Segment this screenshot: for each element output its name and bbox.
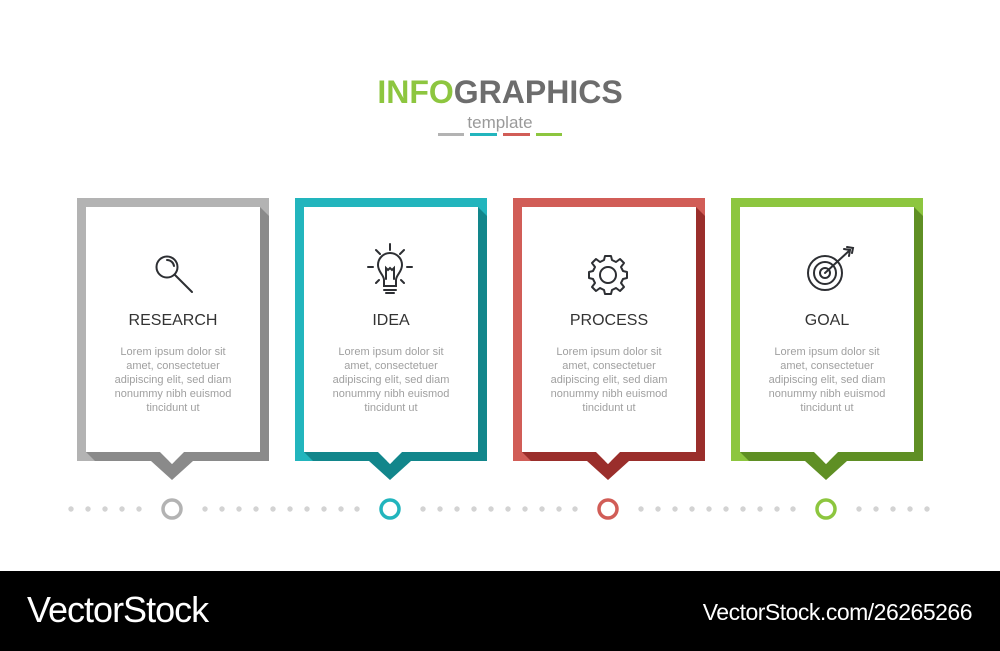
text: idea body: amet, consectetuer <box>344 360 438 372</box>
text: goal body: tincidunt ut <box>800 402 854 414</box>
card: goal <box>731 198 923 480</box>
text: process body: Lorem ipsum dolor sit <box>556 346 662 358</box>
card: idea <box>295 198 487 480</box>
text: goal body: amet, consectetuer <box>780 360 874 372</box>
text: research body: tincidunt ut <box>146 402 200 414</box>
heading: idea: IDEA <box>372 312 410 329</box>
text: research body: adipiscing elit, sed diam <box>115 374 231 386</box>
card: process <box>513 198 705 480</box>
footer bar: VectorStock.com/26265266 <box>703 599 972 625</box>
text: idea body: adipiscing elit, sed diam <box>333 374 449 386</box>
text: idea body: tincidunt ut <box>364 402 418 414</box>
text: idea body: nonummy nibh euismod <box>333 388 449 400</box>
text: goal body: nonummy nibh euismod <box>769 388 885 400</box>
timeline <box>68 500 930 518</box>
footer bar: VectorStock <box>27 589 210 630</box>
footer bar <box>0 571 1000 651</box>
text: research body: Lorem ipsum dolor sit <box>120 346 226 358</box>
icon: magnifier <box>156 256 192 292</box>
text: idea body: Lorem ipsum dolor sit <box>338 346 444 358</box>
icon: gear <box>589 256 627 294</box>
title: INFOGRAPHICS <box>377 74 623 110</box>
text: goal body: adipiscing elit, sed diam <box>769 374 885 386</box>
icon: target <box>808 247 853 290</box>
text: process body: adipiscing elit, sed diam <box>551 374 667 386</box>
heading: research: RESEARCH <box>129 312 217 329</box>
text: process body: tincidunt ut <box>582 402 636 414</box>
title <box>377 74 623 136</box>
text: research body: amet, consectetuer <box>126 360 220 372</box>
title: template <box>467 113 533 132</box>
card: research <box>77 198 269 480</box>
heading: goal: GOAL <box>805 312 849 329</box>
heading: process: PROCESS <box>570 312 648 329</box>
text: process body: nonummy nibh euismod <box>551 388 667 400</box>
icon: light bulb <box>368 244 412 293</box>
text: process body: amet, consectetuer <box>562 360 656 372</box>
text: research body: nonummy nibh euismod <box>115 388 231 400</box>
text: goal body: Lorem ipsum dolor sit <box>774 346 880 358</box>
